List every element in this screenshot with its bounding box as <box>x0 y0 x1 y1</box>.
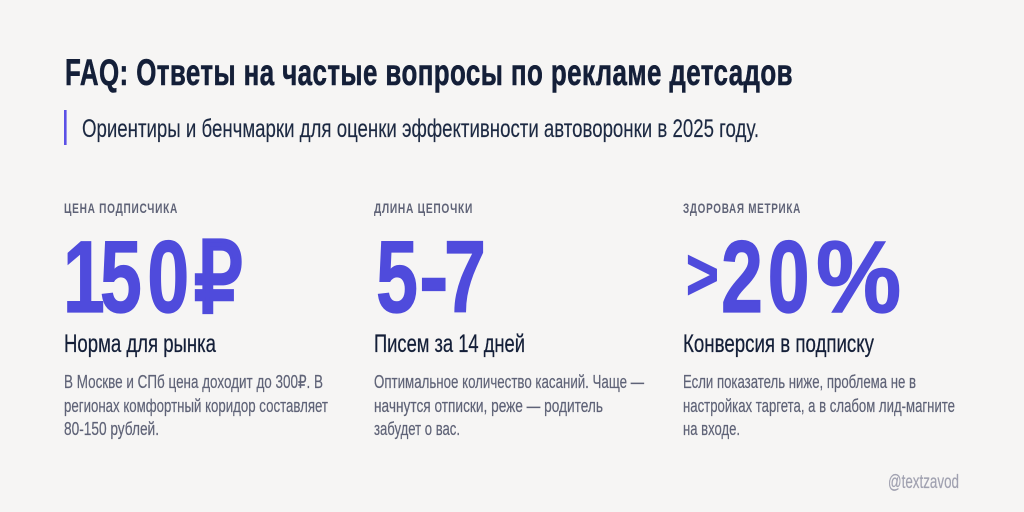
heading: emails in 14 days: Писем за 14 дней <box>374 330 525 358</box>
label: chain length: ДЛИНА ЦЕПОЧКИ <box>374 200 473 216</box>
watermark: @textzavod <box>888 472 959 493</box>
heading: subscription conversion: Конверсия в подписку <box>683 330 874 358</box>
description: healthy metric: Если показатель ниже, проблема не в <box>683 372 916 392</box>
description: healthy metric <box>683 372 955 439</box>
description: subscriber price <box>64 372 328 439</box>
description: chain length: начнутся отписки, реже — родитель <box>374 396 603 416</box>
big number: 150 rubles: ₽ <box>194 223 243 333</box>
panel: chain length <box>374 200 644 439</box>
label: healthy metric: ЗДОРОВАЯ МЕТРИКА <box>683 200 801 216</box>
big number: 5-7 <box>376 219 486 335</box>
description: subscriber price: регионах комфортный коридор составляет <box>64 396 328 416</box>
description: subscriber price: В Москве и СПб цена доходит до 300₽. В <box>64 372 323 392</box>
description: subscriber price: 80-150 рублей. <box>64 419 159 439</box>
big number: 5-7: 5 <box>376 221 418 335</box>
description: healthy metric: на входе. <box>683 419 740 439</box>
big number: over 20 percent: 20 <box>721 221 810 335</box>
subtitle with accent bar: Ориентиры и бенчмарки для оценки эффективности автоворонки в 2025 году. <box>82 115 759 143</box>
big number: over 20 percent <box>686 219 901 335</box>
big number: 5-7: 7 <box>444 221 486 335</box>
heading: market norm: Норма для рынка <box>64 330 216 358</box>
description: chain length <box>374 372 644 439</box>
description: chain length: Оптимальное количество касаний. Чаще — <box>374 372 644 392</box>
big number: 5-7: - <box>419 219 449 333</box>
panel: subscriber price <box>63 200 328 439</box>
big number: over 20 percent: > <box>686 234 719 315</box>
big number: 150 rubles: 150 <box>63 221 189 335</box>
big number: over 20 percent: % <box>816 219 901 334</box>
description: chain length: забудет о вас. <box>374 419 460 439</box>
label: subscriber price: ЦЕНА ПОДПИСЧИКА <box>64 200 178 216</box>
panel: healthy metric <box>683 200 955 439</box>
